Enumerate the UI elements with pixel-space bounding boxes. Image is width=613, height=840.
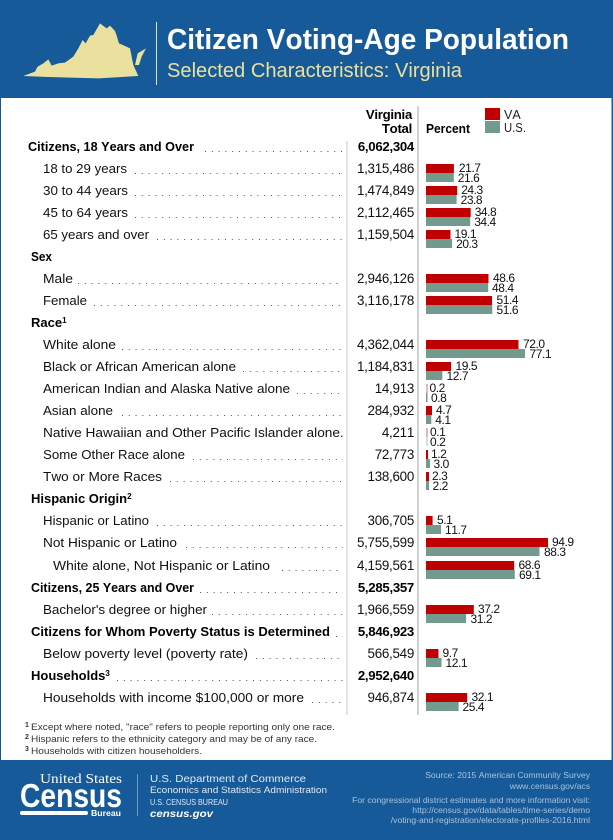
- row: 30 to 44 years: 1,474,849: [357, 183, 414, 198]
- row: Asian alone: [43, 403, 452, 427]
- row: Not Hispanic or Latino: 5,755,599: [357, 535, 414, 550]
- row: Households with income $100,000 or more: 946,874: [368, 690, 415, 705]
- footnotes: Hispanic refers to the ethnicity category and may be of any race.: [31, 733, 317, 744]
- row: 45 to 64 years: [43, 205, 497, 229]
- source and link text: /voting-and-registration/electorate-profiles-2016.html: [391, 815, 590, 825]
- row: Citizens for Whom Poverty Status is Determined: 5,846,923: [358, 624, 414, 639]
- column heading: Percent: Percent: [426, 121, 471, 136]
- row: White alone: 77.1: [530, 347, 552, 361]
- row: 65 years and over: [43, 227, 478, 251]
- row: Male: Male: [43, 271, 73, 286]
- row: Black or African American alone: 12.7: [446, 369, 469, 383]
- row: 18 to 29 years: 21.7: [459, 161, 481, 175]
- heading: Sex: Sex: [31, 249, 53, 264]
- row: 65 years and over: 19.1: [454, 227, 477, 241]
- row: Bachelor's degree or higher: Bachelor's degree or higher: [43, 602, 208, 617]
- row: Asian alone: Asian alone: [43, 403, 113, 418]
- table rows: [28, 139, 574, 714]
- footnotes: 1: [25, 722, 29, 729]
- row: White alone, Not Hispanic or Latino: [53, 558, 541, 582]
- row: Native Hawaiian and Other Pacific Islander alone: 0.2: [430, 435, 446, 449]
- footnotes: [25, 721, 335, 756]
- row: White alone, Not Hispanic or Latino: 4,159,561: [357, 558, 414, 573]
- row: Citizens, 18 Years and Over: Citizens, 18 Years and Over: [28, 139, 194, 154]
- logo: United States Census Bureau: [20, 771, 122, 818]
- row: White alone: [43, 337, 552, 361]
- row: Female: 51.6: [496, 303, 519, 317]
- row: Native Hawaiian and Other Pacific Islander alone: Native Hawaiian and Other Pacific Islander alone: [43, 425, 340, 440]
- row: American Indian and Alaska Native alone: 0.8: [431, 391, 447, 405]
- row: 45 to 64 years: 34.8: [475, 205, 497, 219]
- source and link text: www.census.gov/acs: [509, 781, 590, 791]
- row: 18 to 29 years: 1,315,486: [357, 161, 414, 176]
- row: Citizens, 18 Years and Over: 6,062,304: [358, 139, 415, 154]
- row: Male: 2,946,126: [357, 271, 414, 286]
- row: Two or More Races: Two or More Races: [43, 469, 163, 484]
- row: Households: 2,952,640: [358, 668, 414, 683]
- title: Citizen Voting-Age Population: [167, 24, 569, 56]
- row: Not Hispanic or Latino: [43, 535, 574, 559]
- row: 65 years and over: 1,159,504: [357, 227, 415, 242]
- row: Below poverty level (poverty rate): 9.7: [442, 646, 459, 660]
- row: Native Hawaiian and Other Pacific Islander alone: 4,211: [382, 425, 414, 440]
- row: Bachelor's degree or higher: 31.2: [470, 612, 493, 626]
- row: Households: Households: [31, 668, 105, 683]
- header: [23, 22, 569, 85]
- column heading: Virginia Total: [366, 107, 413, 136]
- department text: Economics and Statistics Administration: [150, 785, 327, 796]
- row: White alone: 72.0: [523, 337, 545, 351]
- row: Hispanic or Latino: [43, 513, 467, 537]
- row: Bachelor's degree or higher: 37.2: [478, 602, 500, 616]
- row: Not Hispanic or Latino: 94.9: [552, 535, 574, 549]
- row: Hispanic or Latino: 5.1: [437, 513, 453, 527]
- row: Hispanic or Latino: Hispanic or Latino: [43, 513, 149, 528]
- column heading: Virginia Total: Total: [382, 121, 412, 136]
- footer band: [20, 770, 591, 825]
- subtitle: Selected Characteristics: Virginia: [167, 60, 463, 82]
- row: 45 to 64 years: 34.4: [474, 215, 497, 229]
- row: American Indian and Alaska Native alone: [43, 381, 447, 405]
- row: Not Hispanic or Latino: 88.3: [544, 545, 566, 559]
- row: Bachelor's degree or higher: [43, 602, 500, 626]
- row: Native Hawaiian and Other Pacific Islander alone: [43, 425, 446, 449]
- row: Bachelor's degree or higher: 1,966,559: [357, 602, 414, 617]
- footnotes: 2: [25, 734, 29, 741]
- row: 18 to 29 years: 18 to 29 years: [43, 161, 128, 176]
- row: White alone: White alone: [43, 337, 116, 352]
- source and link text: For congressional district estimates and more information visit:: [352, 795, 590, 805]
- row: Female: 3,116,178: [357, 293, 414, 308]
- source and link text: [352, 770, 591, 825]
- row: 30 to 44 years: [43, 183, 484, 207]
- logo: United States Census Bureau: Bureau: [91, 808, 121, 818]
- row: Native Hawaiian and Other Pacific Islander alone: .: [340, 425, 344, 440]
- heading: Race: Race: [31, 315, 62, 330]
- heading: Race: 1: [62, 316, 67, 325]
- row: Households with income $100,000 or more: [43, 690, 494, 714]
- row: Male: [43, 271, 515, 295]
- row: Asian alone: 284,932: [368, 403, 414, 418]
- row: 18 to 29 years: [43, 161, 481, 185]
- row: Black or African American alone: [43, 359, 478, 383]
- row: Some Other Race alone: [43, 447, 450, 471]
- legend: [485, 108, 526, 135]
- panel: white table background: [1, 98, 612, 760]
- heading: Hispanic Origin: Hispanic Origin: [31, 491, 127, 506]
- row: 65 years and over: 20.3: [456, 237, 478, 251]
- row: Female: [43, 293, 519, 317]
- row: Two or More Races: 2.3: [432, 469, 448, 483]
- department text: census.gov: [150, 809, 215, 820]
- row: American Indian and Alaska Native alone: 0.2: [430, 381, 446, 395]
- row: 30 to 44 years: 24.3: [461, 183, 484, 197]
- column heading: Virginia Total: Virginia: [366, 107, 413, 122]
- row: 45 to 64 years: 45 to 64 years: [43, 205, 129, 220]
- row: White alone, Not Hispanic or Latino: 68.6: [518, 558, 541, 572]
- row: Households: [31, 668, 414, 683]
- row: American Indian and Alaska Native alone: American Indian and Alaska Native alone: [43, 381, 290, 396]
- footnotes: Households with citizen householders.: [31, 745, 202, 756]
- row: Female: 51.4: [496, 293, 519, 307]
- source and link text: http://census.gov/data/tables/time-series/demo: [412, 805, 590, 815]
- column divider lines: [346, 106, 419, 715]
- footnotes: Except where noted, "race" refers to people reporting only one race.: [31, 721, 335, 732]
- row: 65 years and over: 65 years and over: [43, 227, 150, 242]
- row: Hispanic or Latino: 306,705: [368, 513, 414, 528]
- row: Asian alone: 4.7: [436, 403, 452, 417]
- row: White alone, Not Hispanic or Latino: White alone, Not Hispanic or Latino: [53, 558, 270, 573]
- row: Below poverty level (poverty rate): 12.1: [446, 656, 468, 670]
- department text: [150, 773, 327, 820]
- row: Citizens, 18 Years and Over: [28, 139, 415, 154]
- row: Some Other Race alone: 1.2: [431, 447, 447, 461]
- logo: United States Census Bureau: Census: [20, 777, 122, 814]
- row: Asian alone: 4.1: [435, 413, 451, 427]
- row: White alone: 4,362,044: [357, 337, 415, 352]
- row: American Indian and Alaska Native alone: 14,913: [375, 381, 414, 396]
- row: Black or African American alone: 1,184,831: [357, 359, 414, 374]
- row: Black or African American alone: Black or African American alone: [43, 359, 236, 374]
- row: Some Other Race alone: 3.0: [434, 457, 450, 471]
- department text: U.S. CENSUS BUREAU: [150, 798, 228, 807]
- row: 30 to 44 years: 23.8: [461, 193, 483, 207]
- department text: U.S. Department of Commerce: [150, 773, 306, 785]
- source and link text: Source: 2015 American Community Survey: [425, 770, 591, 780]
- heading: Hispanic Origin: 2: [127, 492, 132, 501]
- logo: United States Census Bureau: United States: [40, 771, 122, 786]
- row: 45 to 64 years: 2,112,465: [357, 205, 414, 220]
- row: 18 to 29 years: 21.6: [458, 171, 480, 185]
- row: Black or African American alone: 19.5: [456, 359, 478, 373]
- row: Households with income $100,000 or more: Households with income $100,000 or more: [43, 690, 304, 705]
- row: Male: 48.6: [493, 271, 515, 285]
- row: Male: 48.4: [492, 281, 514, 295]
- row: Two or More Races: 138,600: [368, 469, 414, 484]
- row: Below poverty level (poverty rate): [43, 646, 468, 670]
- row: Some Other Race alone: 72,773: [375, 447, 414, 462]
- row: Households with income $100,000 or more: 25.4: [462, 700, 485, 714]
- row: Female: Female: [43, 293, 87, 308]
- row: Hispanic or Latino: 11.7: [445, 523, 467, 537]
- row: Households: 3: [105, 669, 110, 678]
- row: Two or More Races: 2.2: [432, 479, 449, 493]
- row: Households with income $100,000 or more: 32.1: [472, 690, 494, 704]
- row: Citizens for Whom Poverty Status is Determined: Citizens for Whom Poverty Status is Determined: [31, 624, 330, 639]
- row: Some Other Race alone: Some Other Race alone: [43, 447, 185, 462]
- row: Citizens, 25 Years and Over: 5,285,357: [358, 580, 414, 595]
- row: 30 to 44 years: 30 to 44 years: [43, 183, 129, 198]
- row: Native Hawaiian and Other Pacific Islander alone: 0.1: [430, 425, 446, 439]
- row: Below poverty level (poverty rate): 566,549: [368, 646, 414, 661]
- footnotes: 3: [25, 746, 29, 753]
- row: Below poverty level (poverty rate): Below poverty level (poverty rate): [43, 646, 248, 661]
- row: Two or More Races: [43, 469, 449, 493]
- legend: VA: [504, 108, 521, 122]
- row: Citizens, 25 Years and Over: Citizens, 25 Years and Over: [31, 580, 194, 595]
- legend: U.S.: [504, 121, 526, 135]
- row: Not Hispanic or Latino: Not Hispanic or Latino: [43, 535, 177, 550]
- row: Citizens, 25 Years and Over: [31, 580, 414, 595]
- row: White alone, Not Hispanic or Latino: 69.1: [519, 568, 541, 582]
- icon: Virginia state map: [23, 23, 146, 78]
